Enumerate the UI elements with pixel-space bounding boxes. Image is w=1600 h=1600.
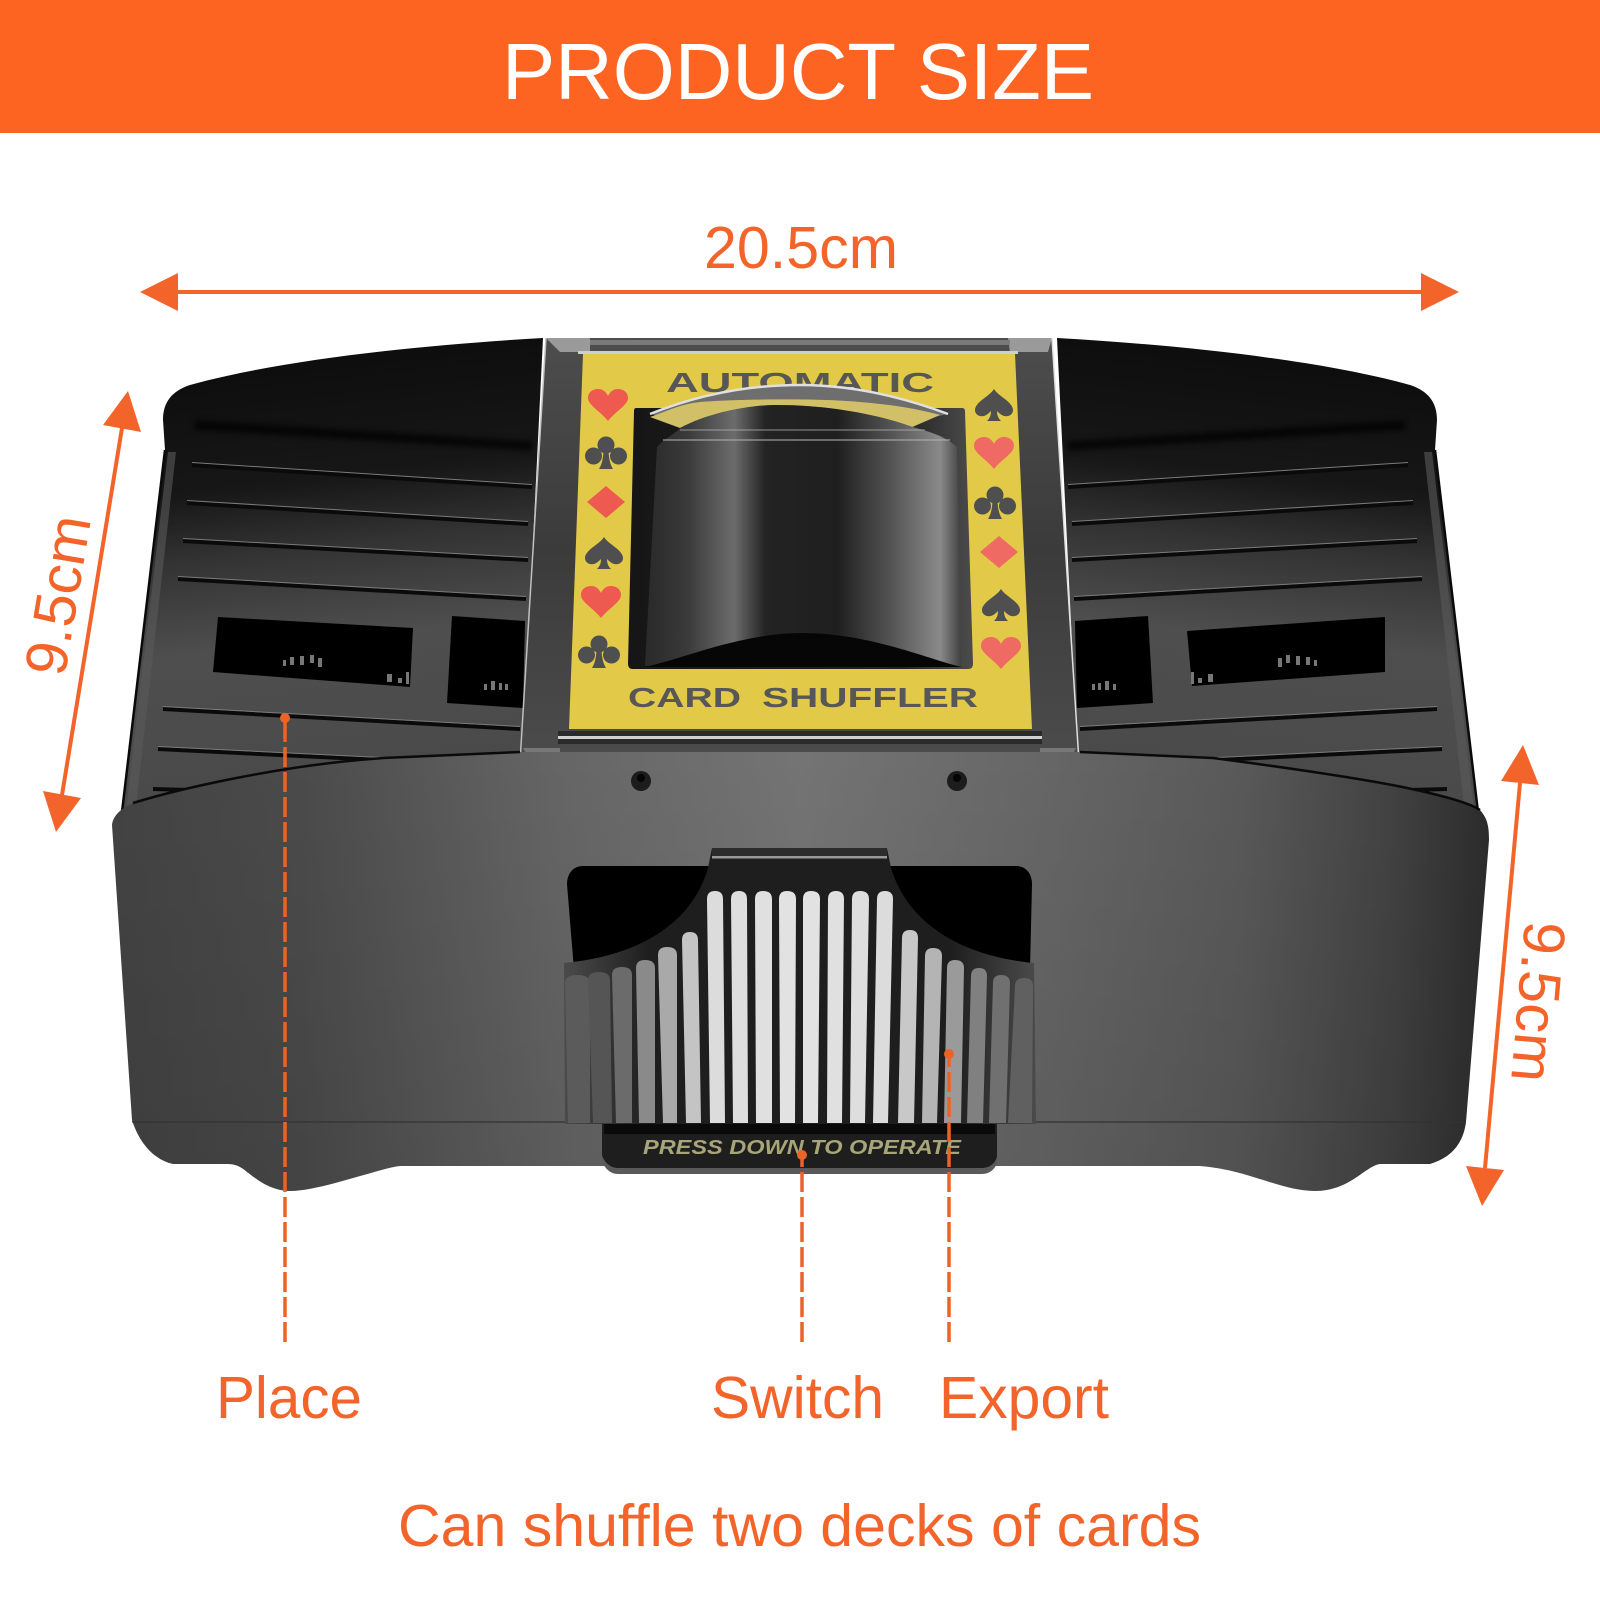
yellow card shuffler label: [569, 354, 1032, 729]
header banner: [0, 0, 1600, 133]
card drum window: [628, 385, 973, 669]
switch text: PRESS DOWN TO OPERATE: [643, 1137, 962, 1159]
suit icons: left column: [578, 389, 628, 668]
title: PRODUCT SIZE: [502, 27, 1094, 116]
clear lid housing: [520, 338, 1079, 765]
lower lid frame highlight: [558, 731, 1042, 744]
leader line: place: [280, 713, 290, 1342]
yellow reflection under dome: [650, 399, 940, 428]
drum: [645, 405, 961, 666]
lid text: automatic: AUTOMATIC: [666, 367, 934, 398]
suit icons: right column: [974, 389, 1021, 669]
depth label: 9.5cm: [12, 510, 104, 680]
clear dome: [650, 385, 948, 420]
front housing: [112, 752, 1489, 1191]
height label: 9.5cm: [1498, 919, 1578, 1085]
depth dimension arrow: [43, 391, 141, 832]
screw left: [631, 771, 651, 791]
clear dome edge: [650, 385, 948, 414]
card export grille: [564, 848, 1036, 1124]
height dimension arrow: [1466, 745, 1539, 1206]
label: place: Place: [216, 1365, 362, 1431]
ribs: [565, 891, 1033, 1123]
caption: Can shuffle two decks of cards: [398, 1493, 1201, 1559]
width dimension arrow: [140, 273, 1459, 311]
label: export: Export: [939, 1365, 1109, 1431]
width label: 20.5cm: [704, 215, 898, 281]
card export opening: [567, 866, 1032, 970]
leader line: export: [944, 1049, 954, 1342]
lid text: card shuffler: [628, 682, 978, 713]
lid text: card shuffler: CARD: [628, 682, 741, 713]
lid text: card shuffler: SHUFFLER: [762, 682, 978, 713]
label: switch: Switch: [711, 1365, 884, 1431]
product: card shuffler: [112, 338, 1489, 1191]
leader line: switch: [797, 1150, 807, 1342]
screw right: [947, 771, 967, 791]
press-down switch plate: [602, 1122, 997, 1174]
right card tray: [1057, 338, 1482, 835]
left card tray: [118, 338, 543, 835]
